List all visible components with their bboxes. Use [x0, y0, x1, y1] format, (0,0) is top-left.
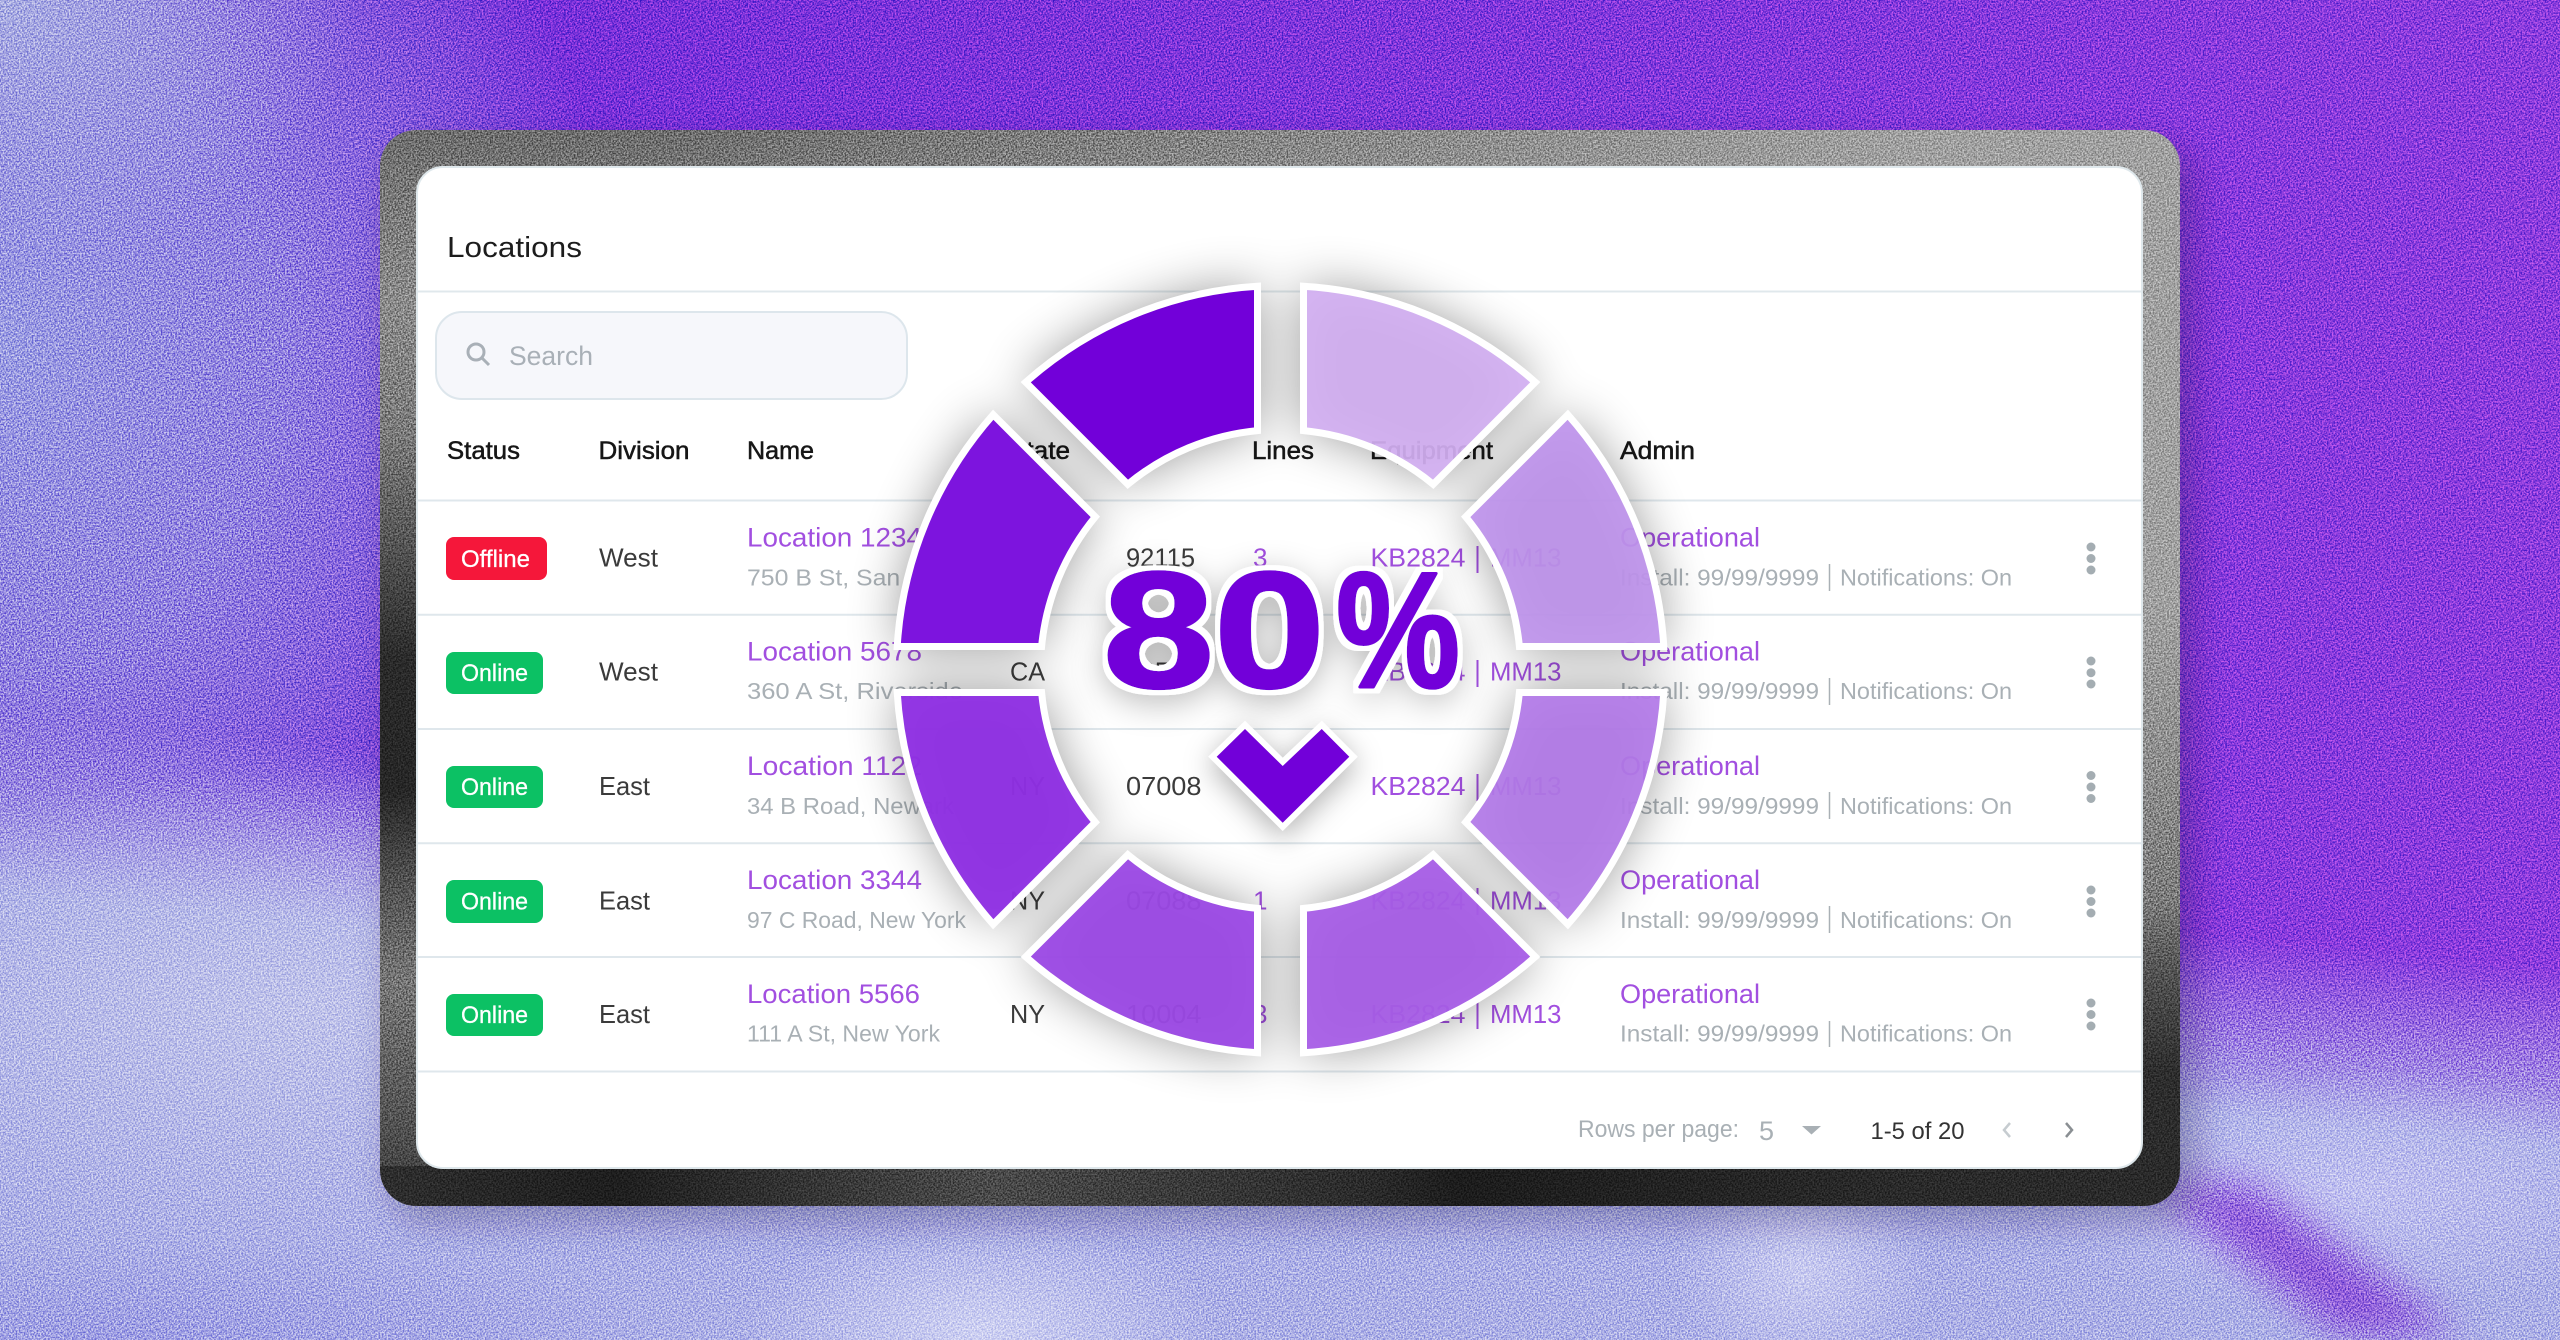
- icon: previous page chevron: [2004, 1123, 2010, 1137]
- donut shadow: [897, 286, 1664, 1053]
- table row 2: 2: [1253, 657, 1267, 687]
- table row 4: Location 3344: [747, 865, 922, 895]
- table header row: [447, 437, 1695, 465]
- table row 4: East: [599, 886, 651, 916]
- table header row: Lines: [1252, 437, 1314, 465]
- segment 2: upper left: [897, 415, 1095, 646]
- table row 2: KB2824: [1370, 657, 1466, 687]
- table row 2: West: [599, 657, 659, 687]
- status badge: Online: [446, 766, 543, 808]
- table row 1: Notifications: On: [1840, 564, 2012, 590]
- table row 2: Location 5678: [747, 637, 922, 667]
- icon: magnifier: [468, 344, 489, 365]
- heading: Locations: Locations: [447, 232, 582, 264]
- status badge: Online: Online: [461, 888, 528, 916]
- donut chart: 80% of 8 segments in fading purple: [897, 286, 1664, 1053]
- pagination footer: 1-5 of 20: [1870, 1118, 1964, 1145]
- pagination footer: 5: [1759, 1116, 1774, 1146]
- status badge: Online: [446, 652, 543, 694]
- menu: kebab dots: [2086, 771, 2096, 803]
- menu: kebab dots: [2086, 998, 2096, 1030]
- big number: 80%: [1103, 538, 1460, 722]
- table row 5: [446, 979, 2096, 1047]
- table row 3: Install: 99/99/9999: [1620, 793, 1819, 819]
- table header row: Equipment: [1370, 437, 1493, 465]
- table row 3: Operational: [1620, 751, 1760, 781]
- table row 2: Operational: [1620, 637, 1760, 667]
- table row 5: MM13: [1490, 999, 1562, 1029]
- table header row: Status: [447, 437, 520, 465]
- panel frame: dark metallic card: [380, 130, 2180, 1206]
- search box: Search: [509, 341, 593, 371]
- table header row: State: [1009, 437, 1070, 465]
- table row 4: Operational: [1620, 865, 1760, 895]
- search box: [436, 312, 907, 399]
- table header row: Admin: [1620, 437, 1695, 465]
- table row 5: 10004: [1126, 999, 1202, 1029]
- table row 5: Operational: [1620, 979, 1760, 1009]
- table row 3: NY: [1010, 771, 1045, 801]
- table row 4: MM13: [1490, 886, 1562, 916]
- table header row: Division: [598, 437, 690, 465]
- icon: downward chevron: [1217, 729, 1349, 823]
- segment 3: lower left: [897, 692, 1095, 924]
- table row 4: 97 C Road, New York: [747, 907, 966, 933]
- table row 2: 360 A St, Riverside: [747, 678, 963, 704]
- table row 3: 07008: [1126, 771, 1202, 801]
- table row 4: KB2824: [1370, 886, 1466, 916]
- pagination footer: Rows per page:: [1578, 1116, 1739, 1143]
- table row 2: Notifications: On: [1840, 678, 2012, 704]
- table row 4: Notifications: On: [1840, 907, 2012, 933]
- table row 3: 1: [1253, 771, 1267, 801]
- status badge: Online: Online: [461, 660, 528, 687]
- table row 5: Install: 99/99/9999: [1620, 1021, 1819, 1047]
- table row 5: 111 A St, New York: [747, 1021, 940, 1047]
- status badge: Online: [446, 994, 543, 1036]
- table row 2: CA: [1010, 657, 1046, 687]
- panel: locations table card: [417, 167, 2142, 1168]
- table row 4: 1: [1253, 886, 1267, 916]
- status badge: Offline: [446, 537, 547, 580]
- big number: 80%: 80: [1103, 538, 1325, 722]
- table row 1: [446, 522, 2096, 591]
- table header row: Name: [747, 437, 814, 465]
- segment 4: bottom left: [1026, 855, 1258, 1053]
- status badge: Online: [446, 880, 543, 923]
- icon: dropdown triangle: [1802, 1126, 1821, 1134]
- table row 1: 92115: [1126, 542, 1195, 572]
- table row 2: [446, 637, 2096, 705]
- table row 3: 34 B Road, Newark: [747, 793, 954, 819]
- table row 3: Location 1122: [747, 751, 922, 781]
- table row 1: Install: 99/99/9999: [1620, 564, 1819, 590]
- segment 5: bottom right: [1304, 855, 1535, 1053]
- table row 3: [446, 751, 2096, 819]
- table row 4: NY: [1010, 886, 1045, 916]
- table row 1: CA: [1010, 542, 1046, 572]
- icon: next page chevron: [2066, 1123, 2072, 1137]
- segment 8: top right: [1304, 286, 1535, 484]
- status badge: Online: Online: [461, 774, 528, 801]
- table row 1: West: [599, 542, 659, 572]
- table row 3: KB2824: [1370, 771, 1466, 801]
- table row 5: East: [599, 999, 651, 1029]
- table row 2: Install: 99/99/9999: [1620, 678, 1819, 704]
- pagination footer: [1578, 1116, 2072, 1146]
- table row 3: East: [599, 771, 651, 801]
- table row 1: Location 1234: [747, 522, 922, 552]
- table row 3: Notifications: On: [1840, 793, 2012, 819]
- table row 5: NY: [1010, 999, 1045, 1029]
- table row 1: Operational: [1620, 522, 1760, 552]
- table row 5: 3: [1253, 999, 1267, 1029]
- table row 4: Install: 99/99/9999: [1620, 907, 1819, 933]
- segment 1: top left: [1026, 286, 1258, 484]
- table row 5: Notifications: On: [1840, 1021, 2012, 1047]
- segment 7: upper right: [1466, 415, 1664, 646]
- table row 4: 07088: [1126, 886, 1202, 916]
- table row 5: KB2824: [1370, 999, 1466, 1029]
- segment 6: lower right: [1466, 692, 1664, 924]
- table row 1: KB2824: [1370, 542, 1466, 572]
- menu: kebab dots: [2086, 886, 2096, 918]
- table row 2: 92501: [1126, 657, 1198, 687]
- table row 3: MM13: [1490, 771, 1562, 801]
- table row 5: Location 5566: [747, 979, 920, 1009]
- table row 1: 750 B St, San Diego: [747, 564, 972, 590]
- menu: kebab dots: [2086, 542, 2096, 574]
- big number: 80%: %: [1336, 538, 1460, 722]
- menu: kebab dots: [2086, 656, 2096, 688]
- table row 1: MM13: [1490, 542, 1562, 572]
- status badge: Offline: Offline: [461, 546, 530, 573]
- table row 1: 3: [1253, 542, 1267, 572]
- table row 2: MM13: [1490, 657, 1562, 687]
- status badge: Online: Online: [461, 1002, 528, 1029]
- table row 4: [446, 865, 2096, 933]
